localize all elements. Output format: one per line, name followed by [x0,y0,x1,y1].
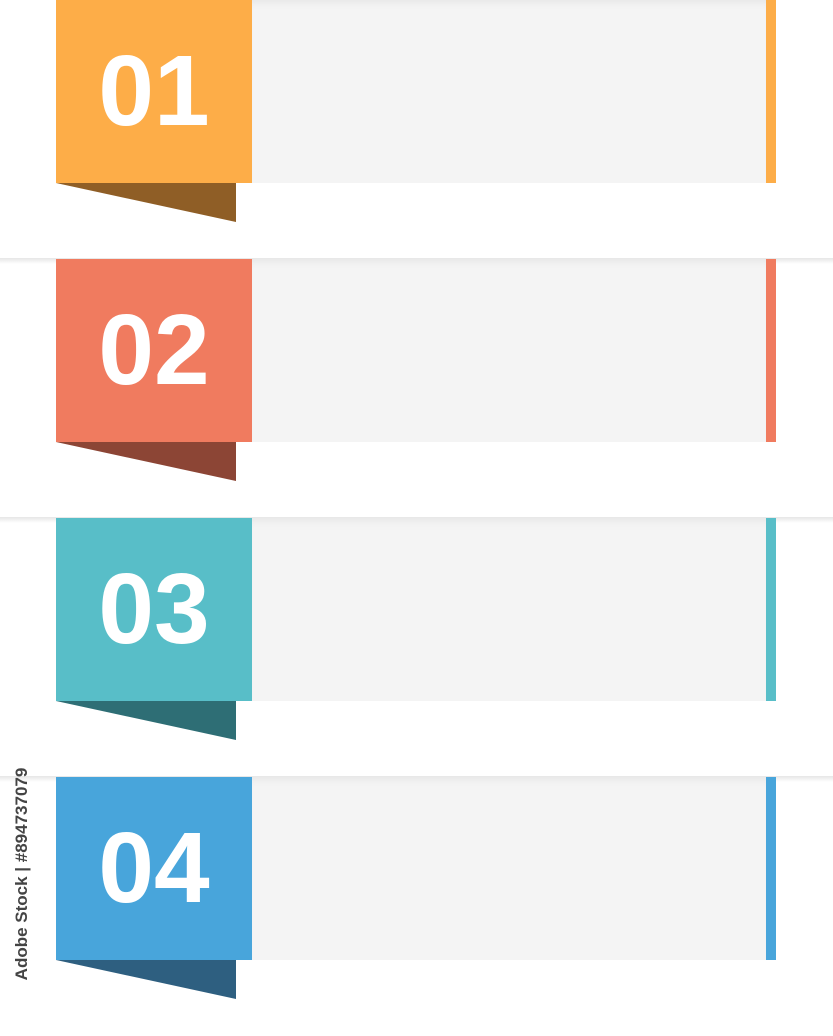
fold 4 [56,960,236,999]
panel: content 1 [252,0,766,183]
number badge 01 [56,0,252,183]
number badge 02 [56,259,252,442]
row 4 [56,777,776,999]
number badge 03 [56,518,252,701]
row 1 [56,0,776,222]
number badge 03: 03 [98,553,210,665]
number badge 02: 02 [98,294,210,406]
row 3 [56,518,776,740]
fold 3 [56,701,236,740]
number badge 04 [56,777,252,960]
watermark text: Adobe Stock | #894737079 [12,768,31,980]
fold 2 [56,442,236,481]
panel: content 3 [252,518,766,701]
accent bar 3 [766,518,776,701]
accent bar 2 [766,259,776,442]
number badge 04: 04 [98,812,210,924]
accent bar 1 [766,0,776,183]
row 2 [56,259,776,481]
accent bar 4 [766,777,776,960]
panel: content 2 [252,259,766,442]
number badge 01: 01 [98,35,210,147]
panel: content 4 [252,777,766,960]
fold 1 [56,183,236,222]
